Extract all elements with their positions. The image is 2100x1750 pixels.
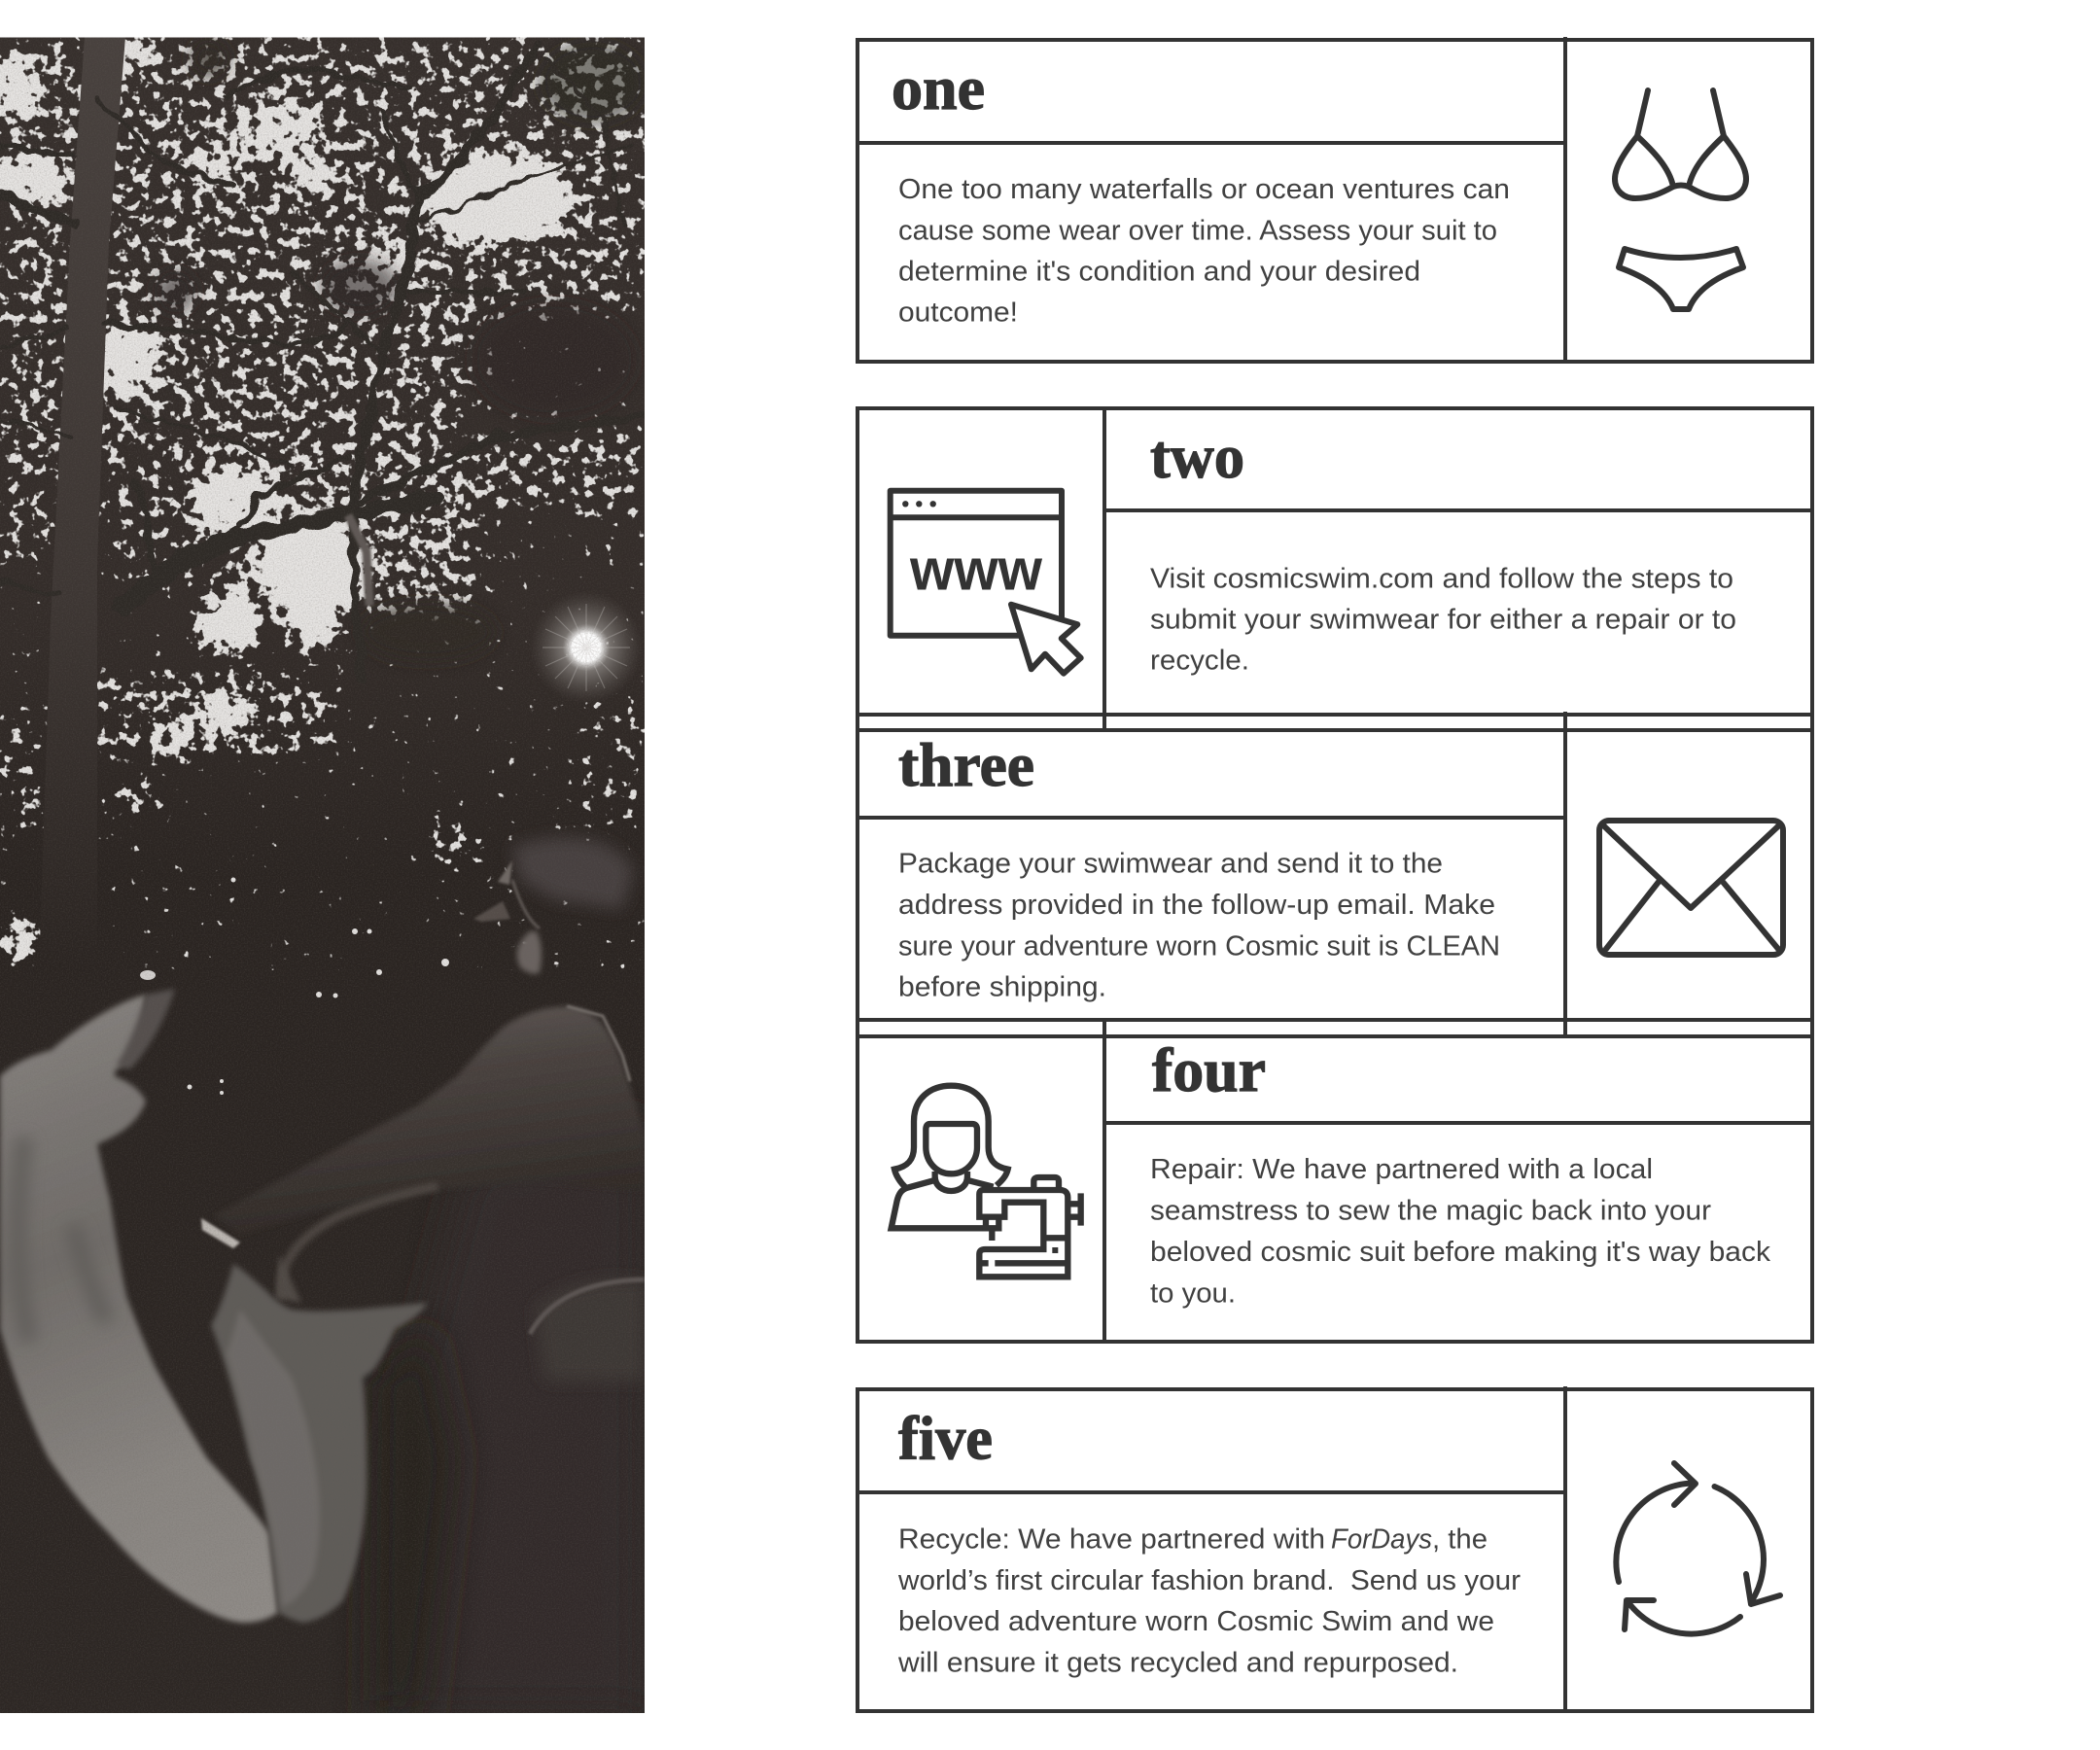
text: step four description (1150, 1154, 1771, 1309)
text: step five description (897, 1524, 1521, 1678)
heading: two: two (1150, 422, 1244, 491)
text: step three description: before shipping. (898, 972, 1106, 1003)
forearm fold (277, 1254, 301, 1303)
dark gap beside cloth (379, 1346, 457, 1709)
icon: recycle arrows (1616, 1463, 1780, 1634)
hair and face (473, 838, 634, 974)
text: step one description: One too many waterfalls or ocean ventures can (898, 174, 1510, 205)
cloth second fold (211, 1264, 428, 1623)
cloth inner blade (227, 1310, 320, 1606)
text: step one description (898, 174, 1510, 329)
text: step three description: sure your adventure worn Cosmic suit is CLEAN (898, 931, 1500, 962)
heading: four: four (1152, 1035, 1266, 1104)
text: step one description: cause some wear over time. Assess your suit to (898, 216, 1497, 247)
sun flare (536, 597, 637, 698)
top strap (567, 1006, 630, 1081)
cloth dark streak at top (117, 989, 175, 1069)
text: step three description (898, 848, 1500, 1003)
small light spots in lower forest (140, 877, 449, 1095)
dark foliage clumps (154, 39, 647, 661)
icon: bikini (1615, 90, 1746, 309)
text: step two description: submit your swimwear for either a repair or to (1150, 605, 1736, 636)
text: step one description: determine it's condition and your desired (898, 257, 1420, 288)
cloth main fold (0, 995, 278, 1623)
panel: step two (858, 408, 1812, 730)
panel: step five (858, 1386, 1812, 1711)
text: step five description: beloved adventure worn Cosmic Swim and we (898, 1606, 1494, 1637)
panel: step three (858, 712, 1812, 1036)
icon: envelope (1599, 821, 1783, 955)
text: step five description: , the (1432, 1524, 1488, 1556)
body of woman (446, 1185, 618, 1688)
text: step five description: ForDays (1331, 1524, 1432, 1556)
text: step one description: outcome! (898, 298, 1018, 329)
hip and bikini strap (530, 1279, 645, 1381)
text: step five description: will ensure it gets recycled and repurposed. (897, 1647, 1458, 1678)
light branch (348, 515, 369, 606)
text: step four description: to you. (1150, 1278, 1236, 1309)
forest canopy light coming through leaves (0, 33, 645, 956)
text: step three description: address provided in the follow-up email. Make (898, 890, 1495, 921)
cloth shadow areas (18, 1138, 107, 1342)
text: step two description: recycle. (1150, 646, 1249, 677)
photo: woman dancing with a flowing cloth under forest trees (0, 33, 647, 1713)
text: step four description: seamstress to sew the magic back into your (1150, 1196, 1711, 1227)
text: step five description: Recycle: We have partnered with (898, 1524, 1325, 1556)
icon: browser window with cursor (891, 491, 1081, 674)
hand highlight (201, 1218, 240, 1248)
text: step four description: beloved cosmic suit before making it's way back (1150, 1237, 1771, 1268)
tree branches (0, 45, 645, 681)
text: step five description: world’s first circular fashion brand. Send us your (897, 1565, 1521, 1596)
heading: one: one (892, 53, 985, 122)
tree trunk (39, 37, 125, 972)
icon: browser window with cursor: www (909, 537, 1042, 603)
panel: step one (858, 37, 1812, 362)
arm and shoulder (214, 1006, 645, 1235)
film grain (0, 37, 645, 1713)
text: step two description (1150, 564, 1736, 677)
text: step three description: Package your swimwear and send it to the (898, 848, 1443, 879)
second arm (281, 1186, 438, 1298)
heading: five: five (898, 1404, 993, 1472)
text: step four description: Repair: We have partnered with a local (1150, 1154, 1653, 1185)
icon: seamstress with sewing machine (892, 1086, 1081, 1277)
text: step two description: Visit cosmicswim.com and follow the steps to (1150, 564, 1733, 595)
heading: three: three (898, 730, 1034, 799)
panel: step four (858, 1020, 1812, 1342)
